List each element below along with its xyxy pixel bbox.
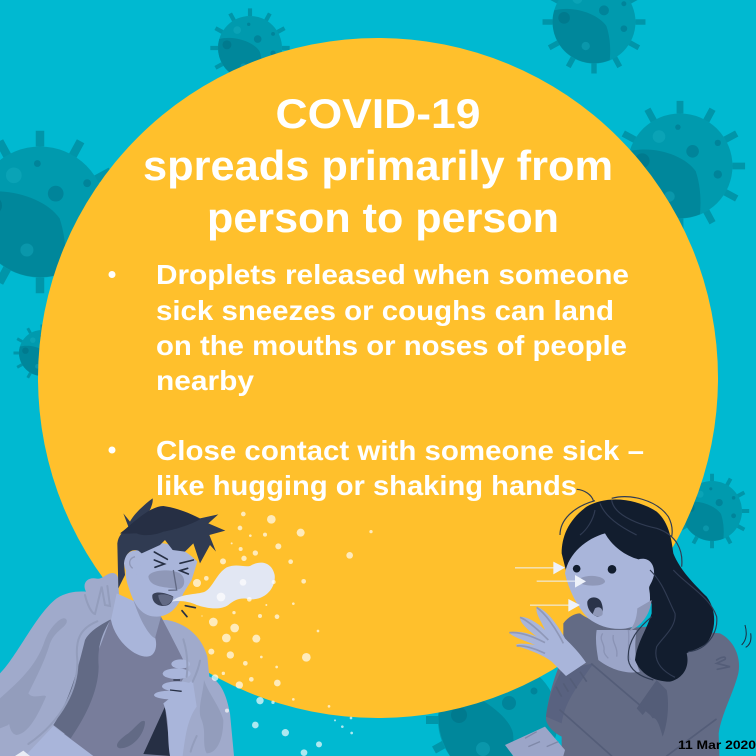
hair	[117, 498, 225, 588]
title: COVID-19	[276, 90, 480, 137]
title: person to person	[207, 194, 559, 241]
icon: virus small left	[13, 324, 71, 382]
dark undershirt	[143, 707, 171, 756]
chin shadow	[133, 600, 161, 638]
bullet 1	[108, 259, 629, 396]
neck shadow	[628, 600, 652, 632]
hand	[509, 607, 586, 676]
bullet list	[108, 259, 644, 501]
illustration: startled woman	[505, 489, 751, 756]
cheek	[148, 570, 184, 589]
date stamp: 11 Mar 2020	[678, 740, 756, 752]
eyes	[573, 565, 580, 572]
bullet 1: Droplets released when someone	[156, 259, 629, 290]
forearm and hand	[154, 659, 197, 756]
illustration: coughing man	[0, 498, 234, 756]
icon: virus top centre	[210, 8, 290, 88]
bullet 2: like hugging or shaking hands	[156, 470, 577, 501]
icon: virus lower right	[675, 474, 749, 548]
arrow: droplets to mouth	[530, 599, 580, 612]
cough cloud	[172, 563, 275, 608]
motion lines	[742, 625, 751, 647]
jacket	[0, 573, 234, 756]
mouth	[587, 597, 603, 617]
ear	[124, 551, 142, 575]
icon: virus top right	[543, 0, 645, 73]
mouth	[152, 592, 173, 606]
face	[565, 533, 654, 629]
face	[126, 543, 197, 617]
sweater collar shading	[637, 680, 668, 737]
sleeve cuff	[505, 727, 565, 756]
neck	[111, 593, 161, 657]
icon: virus right	[615, 101, 745, 231]
bullet 2: Close contact with someone sick –	[156, 435, 644, 466]
jacket shading	[0, 618, 67, 735]
sweater seams	[560, 657, 730, 756]
title	[143, 90, 613, 241]
title: spreads primarily from	[143, 142, 613, 189]
jacket lapel	[25, 726, 93, 756]
cough lines	[182, 597, 197, 617]
hair strands	[560, 489, 717, 680]
jacket creases	[28, 586, 200, 752]
bullet 2	[108, 435, 644, 501]
nose line	[168, 570, 177, 590]
shirt shadow	[53, 619, 111, 738]
jacket right shading	[200, 680, 223, 753]
bullet 1: on the mouths or noses of people	[156, 330, 627, 361]
icon: virus bottom	[426, 660, 558, 756]
sweater	[546, 613, 739, 756]
bullet 1: sick sneezes or coughs can land	[156, 295, 614, 326]
bullet 1: nearby	[156, 365, 254, 396]
arrow: droplets to eye	[515, 562, 565, 574]
turtleneck	[596, 630, 640, 672]
eyes	[154, 552, 193, 574]
shirt	[57, 617, 188, 756]
hair	[562, 500, 714, 682]
icon: virus large left	[0, 131, 121, 293]
arrow: droplets to nose	[537, 575, 586, 588]
nose shade	[580, 576, 605, 586]
droplets	[193, 512, 373, 756]
